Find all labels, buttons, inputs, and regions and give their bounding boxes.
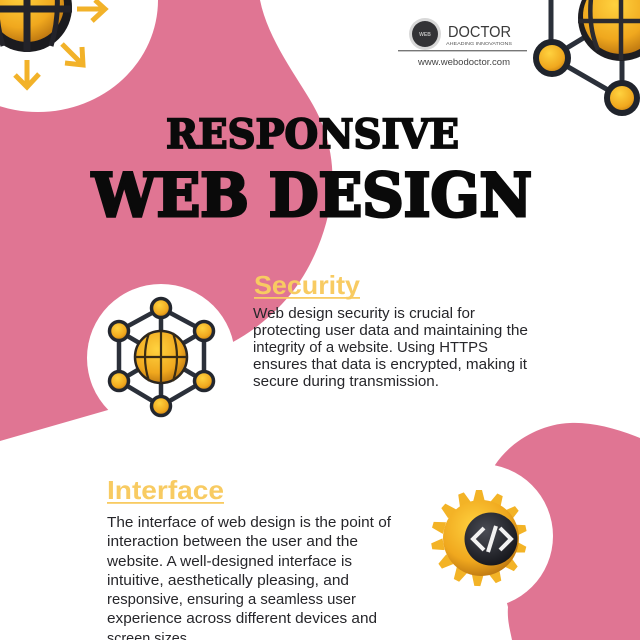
body text: security: ensures that data is encrypted, making it <box>253 356 528 373</box>
panel: pink blob lower right <box>409 423 640 640</box>
icon: globe with arrows, top left <box>0 0 105 87</box>
code symbol <box>473 526 511 552</box>
section: interface <box>106 475 392 640</box>
heading: interface: Interface <box>107 475 224 505</box>
icon: network globe, centre <box>110 298 214 416</box>
gear teeth <box>431 490 527 586</box>
title line 1: RESPONSIVE <box>166 111 459 158</box>
body text: interface: responsive, ensuring a seamless user <box>107 591 356 608</box>
logo: Web Doctor <box>398 18 527 68</box>
heading: security: Security <box>254 270 361 300</box>
arrow down <box>15 60 39 87</box>
title line 2: WEB DESIGN <box>91 161 532 231</box>
logo badge: WEB <box>419 32 431 38</box>
body text: security <box>253 305 528 390</box>
dark hub <box>464 512 518 566</box>
icon: network globe, top right <box>536 0 640 113</box>
title <box>91 111 532 231</box>
body text: security: protecting user data and maintaining the <box>253 322 528 339</box>
body text: security: secure during transmission. <box>253 373 439 390</box>
globe <box>0 0 72 52</box>
gear ring <box>443 500 519 576</box>
logo tagline: AHEADING INNOVATIONS <box>446 41 512 46</box>
globe <box>578 0 640 61</box>
node <box>536 42 568 74</box>
arrow down-right <box>62 44 83 65</box>
body text: security: integrity of a website. Using HTTPS <box>253 339 488 356</box>
network nodes <box>110 298 214 416</box>
node <box>607 83 637 113</box>
website: www.webodoctor.com <box>417 57 510 68</box>
body text: interface: website. A well-designed interface is <box>106 553 352 570</box>
body text: interface <box>106 514 392 640</box>
globe <box>135 331 187 383</box>
body text: interface: experience across different devices and <box>107 610 377 627</box>
section: security <box>253 270 528 390</box>
panel: pink blob upper left <box>0 0 332 441</box>
body text: interface: intuitive, aesthetically pleasing, and <box>107 572 349 589</box>
icon: code gear <box>431 490 527 586</box>
body text: interface: interaction between the user and the <box>107 533 358 550</box>
body text: interface: The interface of web design is the point of <box>107 514 392 531</box>
logo name: DOCTOR <box>448 24 511 41</box>
arrow right <box>77 0 105 21</box>
body text: security: Web design security is crucial for <box>253 305 475 322</box>
